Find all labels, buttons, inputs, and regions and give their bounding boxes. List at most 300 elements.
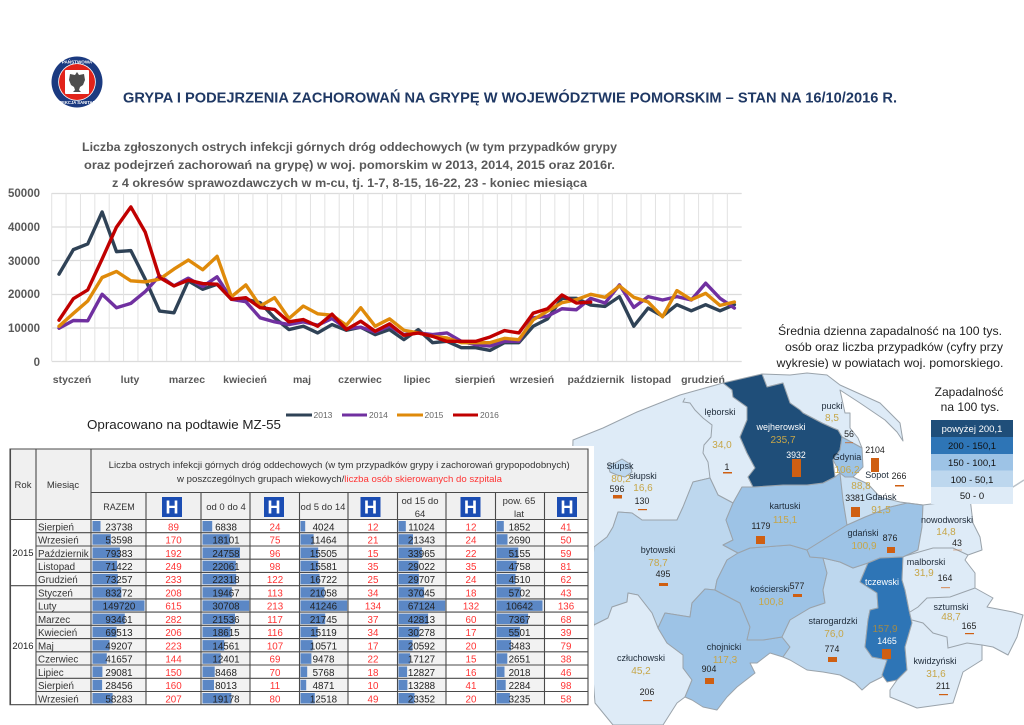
- region: Vistula spit: [970, 480, 1024, 498]
- row: Maj 2016: 107: [267, 641, 283, 652]
- x axis month labels: sierpień: [455, 374, 495, 386]
- row: Grudzień 2015: [38, 575, 571, 586]
- county label: pucki: 8,5: [825, 413, 839, 424]
- y axis labels: 40000: [8, 222, 40, 234]
- row: Październik 2015: 79383: [105, 549, 133, 560]
- x axis month labels: luty: [121, 374, 139, 386]
- county label: tczewski: tczewski: [865, 577, 899, 587]
- table header text: Rok: [15, 480, 32, 491]
- row: Luty 2016: [38, 602, 575, 613]
- row: Wrzesień 2016: 3235: [509, 694, 531, 705]
- title: GRYPA I PODEJRZENIA ZACHOROWAŃ NA GRYPĘ W WOJEWÓDZTWIE POMORSKIM – STAN NA 16/10/2016 R.: [123, 88, 897, 106]
- row: Marzec 2016: 117: [267, 615, 283, 626]
- row: Kwiecień 2016: 17: [466, 628, 476, 639]
- x axis month labels: [53, 374, 725, 386]
- region: gdański: [807, 503, 923, 568]
- year labels: 2015: [12, 548, 34, 559]
- county label: starogardzki: starogardzki: [808, 616, 858, 626]
- row: Sierpień 2015: Sierpień: [38, 522, 74, 533]
- map legend heading: Zapadalność: [935, 385, 1003, 399]
- y axis labels: 30000: [8, 256, 40, 268]
- row: Sierpień 2016: [38, 681, 572, 692]
- county label: malborski: [907, 557, 952, 588]
- row: Marzec 2016: 68: [561, 615, 572, 626]
- county label: słupski: 130: [635, 496, 649, 506]
- icon: hospital H column 3: [360, 497, 380, 518]
- row: Marzec 2016: 7367: [509, 615, 530, 626]
- county label: wejherowski: 235,7: [770, 435, 796, 446]
- map legend: 50 - 0: [960, 491, 984, 502]
- county label: człuchowski: [617, 653, 665, 701]
- table grid: [10, 449, 588, 705]
- map legend: [931, 420, 1013, 504]
- row: Październik 2015: 15: [368, 549, 379, 560]
- county label: Sopot: 88,8: [851, 481, 871, 492]
- county label: człuchowski: człuchowski: [617, 653, 665, 663]
- row: Kwiecień 2016: 5501: [509, 628, 530, 639]
- county label: bytowski: bytowski: [641, 545, 675, 555]
- county label: bytowski: [641, 545, 675, 586]
- row: Styczeń 2016: 37045: [408, 588, 436, 600]
- county label: sztumski: 165: [962, 621, 976, 631]
- row: Październik 2015: 33965: [408, 549, 436, 560]
- row: Lipiec 2016: Lipiec: [38, 668, 64, 679]
- row: Marzec 2016: 37: [368, 615, 378, 626]
- row: Maj 2016: 20592: [408, 641, 435, 652]
- row: Sierpień 2016: 8013: [215, 681, 237, 692]
- row: Sierpień 2016: 11: [270, 681, 280, 692]
- table rows: cell backgrounds: [37, 520, 544, 704]
- table data bars: [92, 521, 542, 704]
- row: Grudzień 2015: 24: [466, 575, 477, 586]
- row: Wrzesień 2015: [38, 536, 572, 546]
- row: Sierpień 2016: 98: [561, 681, 572, 692]
- region: Sopot and Gdańsk: [840, 473, 923, 525]
- county label: malborski: 31,9: [914, 568, 934, 579]
- row: Wrzesień 2016: 20: [466, 694, 477, 705]
- row: Październik 2015: 96: [270, 549, 281, 560]
- icon: Państwowa Inspekcja Sanitarna logo: INSPEKCJA SANITARNA: [52, 100, 102, 105]
- region: pucki: [762, 373, 903, 448]
- table header text: od 0 do 4: [206, 502, 246, 513]
- row: Styczeń 2016: [38, 588, 572, 600]
- row: Kwiecień 2016: [38, 628, 571, 639]
- x axis month labels: czerwiec: [338, 374, 382, 386]
- row: Wrzesień 2015: 21343: [408, 536, 436, 546]
- county label: wejherowski: [755, 422, 806, 477]
- row: Wrzesień 2015: 18101: [212, 536, 240, 546]
- county label: malborski: 164: [938, 573, 952, 583]
- y axis labels: 50000: [8, 188, 40, 200]
- row: Maj 2016: 49207: [105, 641, 133, 652]
- region: człuchowski: [590, 593, 692, 725]
- county label: chojnicki: [702, 642, 741, 684]
- row: Lipiec 2016: 46: [561, 668, 572, 679]
- row: Sierpień 2015: 23738: [105, 522, 133, 533]
- region: bytowski: [590, 478, 738, 628]
- region: nowodworski, malborski, sztumski, kwidzyński: [890, 498, 1023, 708]
- chart heading: Liczba zgłoszonych ostrych infekcji górnych dróg oddechowych (w tym przypadków grypy: [82, 140, 617, 154]
- region: Gdynia: [833, 437, 863, 477]
- row: Wrzesień 2015: 11464: [310, 536, 337, 546]
- county label: Słupsk: [606, 461, 634, 498]
- row: Luty 2016: 136: [558, 602, 575, 613]
- county label: pucki: [821, 401, 854, 443]
- row: Czerwiec 2016: [38, 655, 572, 666]
- region: wejherowski: [723, 374, 842, 487]
- row: Czerwiec 2016: Czerwiec: [38, 655, 78, 666]
- row: Luty 2016: 30708: [212, 602, 240, 613]
- row: Maj 2016: Maj: [38, 641, 54, 652]
- row: Marzec 2016: 21536: [212, 615, 240, 626]
- row: Maj 2016: 20: [466, 641, 477, 652]
- row: Czerwiec 2016: 2651: [509, 655, 530, 666]
- map description: osób oraz liczba przypadków (cyfry przy: [785, 340, 1003, 354]
- table header text: 64: [415, 509, 425, 520]
- x axis month labels: wrzesień: [509, 374, 554, 386]
- row: Sierpień 2016: 28456: [105, 681, 133, 692]
- row: Sierpień 2016: 10: [368, 681, 379, 692]
- row: Luty 2016: 10642: [506, 602, 533, 613]
- county label: starogardzki: 774: [825, 644, 839, 654]
- row: Grudzień 2015: 73257: [105, 575, 133, 586]
- x axis month labels: styczeń: [53, 374, 91, 386]
- row: Czerwiec 2016: 17127: [408, 655, 435, 666]
- row: Czerwiec 2016: 12401: [212, 655, 240, 666]
- row: Maj 2016: [38, 641, 571, 652]
- row: Lipiec 2016: 150: [165, 668, 182, 679]
- row: Listopad 2015: 22061: [212, 562, 240, 573]
- row: Maj 2016: 17: [368, 641, 378, 652]
- row: Styczeń 2016: 5702: [509, 588, 530, 600]
- row: Czerwiec 2016: 9478: [313, 655, 335, 666]
- map legend: 100 - 50,1: [951, 475, 993, 486]
- row: Październik 2015: 22: [466, 549, 476, 560]
- county label: bytowski: 495: [656, 569, 670, 579]
- county label: chojnicki: 904: [702, 664, 716, 674]
- row: Wrzesień 2016: 207: [165, 694, 182, 705]
- row: Kwiecień 2016: 206: [165, 628, 182, 639]
- table header text: lat: [514, 509, 524, 520]
- icon: Państwowa Inspekcja Sanitarna logo: PAŃSTWOWA: [62, 58, 93, 64]
- row: Maj 2016: 14561: [212, 641, 240, 652]
- row: Styczeń 2016: Styczeń: [38, 588, 73, 600]
- row: Sierpień 2015: 6838: [215, 522, 237, 533]
- row: Sierpień 2015: 4024: [313, 522, 335, 533]
- row: Wrzesień 2015: Wrzesień: [38, 536, 79, 546]
- county label: kwidzyński: 211: [936, 681, 950, 691]
- county label: Gdynia: 2104: [865, 445, 885, 455]
- row: Sierpień 2015: 24: [270, 522, 281, 533]
- line: 2013: [59, 212, 734, 350]
- county label: sztumski: sztumski: [933, 602, 969, 612]
- map description: Średnia dzienna zapadalność na 100 tys.: [778, 323, 1002, 338]
- county label: Gdańsk: [845, 492, 897, 517]
- row: Wrzesień 2016: 58: [561, 694, 572, 705]
- county label: Sopot: Sopot: [865, 470, 889, 480]
- row: Kwiecień 2016: 69513: [105, 628, 133, 639]
- row: Listopad 2015: 35: [466, 562, 477, 573]
- row: Maj 2016: 223: [165, 641, 182, 652]
- row: Styczeń 2016: 34: [368, 588, 379, 600]
- county label: lęborski: lęborski: [704, 407, 736, 417]
- icon: hospital H column 3: H: [364, 498, 377, 518]
- county label: Gdynia: Gdynia: [833, 452, 861, 462]
- map labels and case bars: [606, 401, 976, 701]
- county label: słupski: 16,6: [633, 483, 653, 494]
- county label: Słupsk: 596: [610, 484, 624, 494]
- county label: kartuski: 115,1: [773, 515, 798, 526]
- region: starogardzki: [782, 558, 887, 690]
- row: Październik 2015: 59: [561, 549, 571, 560]
- region: słupski and lęborski: [570, 383, 755, 547]
- row: Listopad 2015: 98: [270, 562, 281, 573]
- county label: Słupsk: 80,2: [611, 474, 631, 485]
- row: Listopad 2015: 35: [368, 562, 379, 573]
- row: Wrzesień 2016: 19178: [212, 694, 240, 705]
- icon: hospital H column 1: H: [166, 498, 178, 518]
- region: river boundary lębork: [683, 398, 712, 478]
- row: Luty 2016: 41246: [310, 602, 338, 613]
- x axis month labels: marzec: [169, 374, 205, 386]
- row: Wrzesień 2015: 21: [368, 536, 378, 546]
- icon: hospital H column 4: [460, 497, 480, 518]
- row: Luty 2016: Luty: [38, 602, 57, 613]
- row: Marzec 2016: 60: [466, 615, 477, 626]
- region: kartuski: [723, 473, 847, 553]
- row: Wrzesień 2016: [38, 694, 572, 705]
- map legend: 150 - 100,1: [948, 458, 996, 469]
- row: Lipiec 2016: 70: [270, 668, 281, 679]
- row: Luty 2016: 134: [365, 602, 382, 613]
- table header text: w poszczególnych grupach wiekowych/liczba osób skierowanych do szpitala: [176, 474, 503, 485]
- row: Listopad 2015: 29022: [408, 562, 435, 573]
- table header text: [15, 460, 570, 520]
- map of Pomeranian counties: [570, 373, 1024, 725]
- county label: lęborski: 34,0: [712, 440, 732, 451]
- row: Listopad 2015: 249: [165, 562, 182, 573]
- row: Grudzień 2015: 4510: [509, 575, 531, 586]
- row: Sierpień 2015: 12: [368, 522, 378, 533]
- icon: hospital H column 1: [162, 497, 182, 518]
- county label: chojnicki: 117,3: [713, 655, 738, 666]
- y axis labels: 20000: [8, 289, 40, 301]
- county label: kwidzyński: 31,6: [926, 669, 946, 680]
- row: Lipiec 2016: [38, 668, 572, 679]
- region: chojnicki: [658, 589, 790, 710]
- row: Lipiec 2016: 18: [368, 668, 379, 679]
- county label: człuchowski: 45,2: [631, 666, 651, 677]
- county label: kościerski: [750, 581, 804, 608]
- county label: pucki: 56: [844, 429, 854, 439]
- row: Styczeń 2016: 18: [466, 588, 477, 600]
- county label: tczewski: 1465: [877, 636, 897, 646]
- x axis month labels: lipiec: [404, 374, 431, 386]
- row: Wrzesień 2016: 23352: [408, 694, 435, 705]
- row: Kwiecień 2016: Kwiecień: [38, 628, 77, 639]
- county label: starogardzki: [808, 616, 858, 662]
- row: Marzec 2016: 42813: [408, 615, 436, 626]
- table header background: [10, 449, 588, 520]
- icon: hospital H column 5: [557, 497, 577, 518]
- row: Styczeń 2016: 83272: [105, 588, 133, 600]
- row: Sierpień 2016: 41: [466, 681, 476, 692]
- row: Wrzesień 2016: Wrzesień: [38, 694, 79, 705]
- row: Luty 2016: 615: [165, 602, 182, 613]
- row: Wrzesień 2016: 58283: [105, 694, 133, 705]
- row: Luty 2016: 132: [463, 602, 479, 613]
- row: Wrzesień 2016: 80: [270, 694, 281, 705]
- county label: lęborski: [704, 407, 736, 474]
- row: Marzec 2016: [38, 615, 572, 626]
- chart legend: [286, 410, 499, 420]
- row: Czerwiec 2016: 69: [270, 655, 280, 666]
- row: Marzec 2016: 282: [165, 615, 182, 626]
- region: Słupsk: [608, 459, 632, 477]
- row: Sierpień 2016: 13288: [408, 681, 436, 692]
- line chart: [8, 188, 742, 420]
- row: Październik 2015: [38, 549, 571, 560]
- year labels: [12, 548, 34, 652]
- row: Czerwiec 2016: 41657: [105, 655, 133, 666]
- row: Kwiecień 2016: 15119: [310, 628, 337, 639]
- row: Sierpień 2016: 160: [165, 681, 182, 692]
- chart legend: 2014: [369, 410, 388, 420]
- icon: hospital H column 2: [264, 497, 284, 518]
- county label: słupski: słupski: [629, 471, 657, 481]
- county label: tczewski: [865, 577, 899, 659]
- table header text: RAZEM: [103, 502, 135, 512]
- row: Lipiec 2016: 16: [466, 668, 477, 679]
- row: Grudzień 2015: 16722: [310, 575, 337, 586]
- county label: Gdańsk: 91,5: [871, 505, 891, 516]
- map legend heading: na 100 tys.: [941, 400, 999, 414]
- county label: kartuski: [752, 501, 801, 544]
- county label: Gdańsk: Gdańsk: [865, 492, 897, 502]
- row: Listopad 2015: 4758: [509, 562, 531, 573]
- icon: hospital H column 5: H: [560, 498, 574, 518]
- row: Sierpień 2015: 1852: [509, 522, 530, 533]
- row: Październik 2015: 15505: [310, 549, 338, 560]
- row: Sierpień 2016: 4871: [313, 681, 334, 692]
- row: Listopad 2015: Listopad: [38, 562, 75, 573]
- county label: sztumski: [933, 602, 976, 634]
- row: Czerwiec 2016: 144: [165, 655, 182, 666]
- county label: gdański: [847, 528, 897, 553]
- row: Listopad 2015: 15581: [310, 562, 337, 573]
- data table: [10, 449, 588, 705]
- chart heading: [82, 140, 617, 190]
- x axis month labels: październik: [568, 374, 625, 386]
- row: Marzec 2016: 93461: [105, 615, 133, 626]
- row: Grudzień 2015: Grudzień: [38, 575, 78, 586]
- row: Grudzień 2015: 122: [267, 575, 283, 586]
- county label: kartuski: 1179: [752, 521, 771, 531]
- row: Wrzesień 2015: 75: [270, 536, 281, 546]
- row: Lipiec 2016: 8468: [215, 668, 237, 679]
- row: Lipiec 2016: 2018: [509, 668, 531, 679]
- county label: Gdynia: [833, 445, 885, 476]
- row: Luty 2016: 213: [267, 602, 284, 613]
- county label: tczewski: 157,9: [872, 624, 898, 635]
- icon: Państwowa Inspekcja Sanitarna logo: [52, 56, 102, 108]
- row: Kwiecień 2016: 116: [267, 628, 283, 639]
- row: Listopad 2015: 81: [561, 562, 571, 573]
- county label: Gdańsk: 3381: [845, 493, 865, 503]
- county label: kościerski: kościerski: [750, 584, 790, 594]
- row: Maj 2016: 10571: [310, 641, 337, 652]
- row: Styczeń 2016: 208: [165, 588, 182, 600]
- year labels: 2016: [12, 641, 34, 652]
- table header text: pow. 65: [503, 496, 535, 507]
- line: 2015: [59, 256, 734, 343]
- row: Luty 2016: 67124: [408, 602, 436, 613]
- table header text: Miesiąc: [47, 480, 79, 491]
- region: tczewski: [860, 557, 912, 682]
- county label: kościerski: 100,8: [758, 597, 784, 608]
- row: Lipiec 2016: 5768: [313, 668, 335, 679]
- row: Lipiec 2016: 29081: [105, 668, 133, 679]
- county label: kościerski: 577: [790, 581, 804, 591]
- row: Czerwiec 2016: 22: [368, 655, 378, 666]
- county label: nowodworski: nowodworski: [921, 515, 973, 525]
- row: Październik 2015: 5155: [509, 549, 531, 560]
- x axis month labels: kwiecień: [223, 374, 267, 386]
- row: Grudzień 2015: 62: [561, 575, 571, 586]
- county label: pucki: pucki: [821, 401, 843, 411]
- county label: Sopot: 266: [892, 471, 906, 481]
- table header text: od 5 do 14: [301, 502, 345, 513]
- row: Wrzesień 2016: 49: [368, 694, 378, 705]
- row: Wrzesień 2015: 2690: [509, 536, 531, 546]
- map legend: 200 - 150,1: [948, 441, 996, 452]
- row: Kwiecień 2016: 18615: [212, 628, 240, 639]
- row: Maj 2016: 79: [561, 641, 571, 652]
- map legend heading: [935, 385, 1003, 414]
- county label: chojnicki: chojnicki: [707, 642, 741, 652]
- row: Czerwiec 2016: 38: [561, 655, 572, 666]
- row: Marzec 2016: Marzec: [38, 615, 70, 626]
- map description: [770, 323, 1015, 375]
- row: Sierpień 2016: Sierpień: [38, 681, 74, 692]
- row: Grudzień 2015: 233: [165, 575, 182, 586]
- row: Wrzesień 2015: 50: [561, 536, 572, 546]
- county label: gdański: gdański: [847, 528, 879, 538]
- x axis month labels: listopad: [631, 374, 671, 386]
- row: Kwiecień 2016: 39: [561, 628, 571, 639]
- table header text: od 15 do: [402, 496, 438, 507]
- county label: malborski: malborski: [907, 557, 945, 567]
- row: Wrzesień 2015: 53598: [105, 536, 133, 546]
- county label: Sopot: [851, 470, 906, 492]
- icon: hospital H column 4: H: [464, 498, 477, 518]
- row: Luty 2016: 149720: [103, 602, 136, 613]
- chart heading: z 4 okresów sprawozdawczych w m-cu, tj. 1-7, 8-15, 16-22, 23 - koniec miesiąca: [112, 176, 587, 190]
- row: Październik 2015: 24758: [212, 549, 240, 560]
- county label: Gdynia: 106,2: [834, 465, 860, 476]
- county label: sztumski: 48,7: [941, 612, 961, 623]
- county label: nowodworski: [921, 515, 973, 550]
- row: Sierpień 2015: [38, 522, 571, 533]
- row: Styczeń 2016: 21058: [310, 588, 338, 600]
- county label: starogardzki: 76,0: [824, 629, 844, 640]
- row: Grudzień 2015: 25: [368, 575, 379, 586]
- row: Marzec 2016: 21745: [310, 615, 338, 626]
- x axis month labels: maj: [293, 374, 311, 386]
- county label: kwidzyński: [913, 656, 957, 695]
- region: internal eastern borders: [905, 548, 982, 648]
- row: Styczeń 2016: 43: [561, 588, 572, 600]
